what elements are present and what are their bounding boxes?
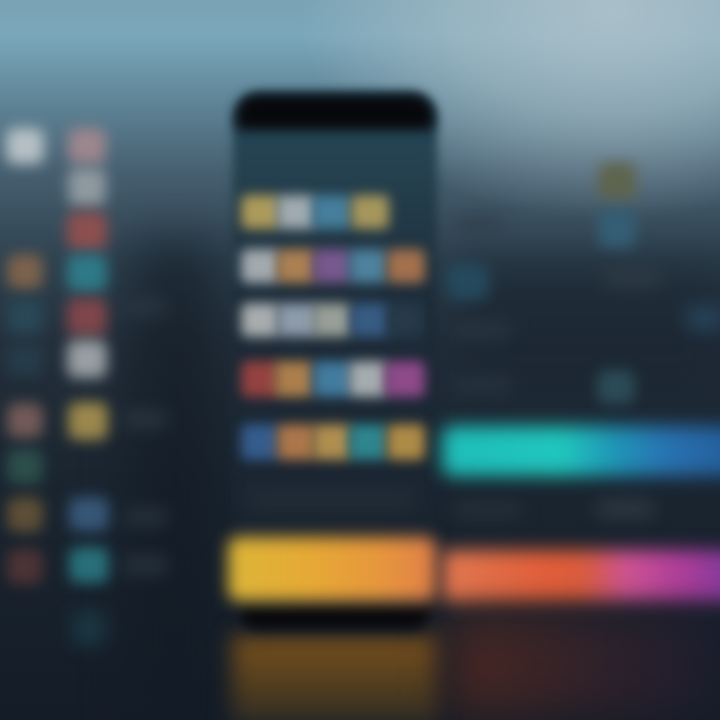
icon: yellow tile [68,402,108,440]
icon: pink tile [68,128,106,164]
faint line [603,270,663,286]
faint line [453,378,513,392]
icon: faint reflection [72,610,106,646]
tile: orange [387,249,425,283]
glow below orange bar [450,615,720,715]
icon: teal tile [7,299,43,334]
tile: silver [241,303,279,337]
tile: dark [387,303,423,337]
row 2 of app tiles [232,240,434,292]
icon: red tile [67,212,107,250]
row 1 of app tiles [232,186,398,238]
background: light haze at top right [300,0,720,220]
icon: blue tile [598,210,636,248]
tile: amber [313,424,351,460]
icon: silver tile [67,340,107,378]
tile: blue [241,424,279,460]
panel: right side tiles [444,154,720,520]
faint line [453,216,503,232]
label line [123,412,168,426]
phone reflection below device [232,636,437,720]
icon: amber tile [7,497,43,532]
icon: aqua tile [69,547,109,583]
label line [123,510,168,524]
icon: white tile [6,128,44,164]
row 3 of app tiles [232,294,424,346]
tile: orange [275,361,313,397]
icon: crimson tile [67,298,107,336]
panel: faint label lines beside left columns [127,410,165,576]
tile: silver [277,195,315,229]
tile: red [241,361,279,397]
label line [123,300,168,314]
icon: pale tile [68,168,106,206]
icon: deep blue tile [447,264,489,300]
tile: blue [351,303,389,337]
background: dark area on the right [450,260,720,410]
tile: teal [349,424,387,460]
icon: blue tile [69,497,109,531]
row 5 of app tiles [234,415,434,469]
icon: cyan tile [67,254,107,292]
tile: gold [387,424,425,460]
wide orange to purple bar [442,550,720,602]
icon: orange tile [7,254,43,289]
background: dark columns on the left [130,240,220,720]
faint row inside phone [246,490,416,508]
wide teal to blue bar [442,426,720,476]
tile: light blue [277,303,317,337]
icon: dim blue tile [7,344,43,376]
tile: blue [349,249,387,283]
tile: silver [241,249,279,283]
panel: left icon column two [58,120,118,648]
tile: blue [313,195,351,229]
phone top bar [236,94,434,130]
tile: yellow [241,195,279,229]
faint line [453,322,513,338]
tile: silver [349,361,387,397]
tile: orange [277,249,315,283]
panel: phone [226,83,445,637]
tile: blue [313,361,351,397]
icon: green tile [7,449,43,484]
phone bottom bar [240,606,430,628]
faint line [453,502,523,518]
faint blue edge tile [685,305,720,331]
icon: teal tile [597,370,635,404]
wide yellow orange bar on phone [228,537,436,601]
row 4 of app tiles [232,352,434,406]
tile: gold [351,195,389,229]
label line [123,558,168,572]
faint line [595,500,655,518]
tile: sage [313,303,351,337]
tile: orange [277,424,315,460]
icon: dark red tile [7,549,43,584]
panel: left icon column one [0,119,53,590]
tile: magenta [385,361,425,397]
icon: olive tile [598,162,636,200]
icon: rose tile [7,403,43,438]
tile: purple [313,249,351,283]
phone body [233,92,437,630]
